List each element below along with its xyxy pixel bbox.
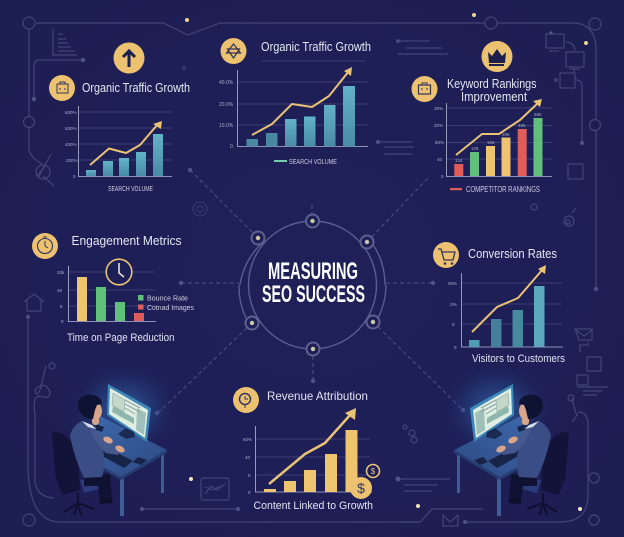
- caption: Content Linked to Growth: [254, 500, 373, 512]
- icon: dollar coins: [350, 464, 380, 499]
- panel: organic traffic growth (left): [49, 42, 190, 193]
- illustration: person at computer (right): [439, 360, 569, 516]
- icon: shopping cart: [433, 242, 459, 268]
- bar chart: 0: [441, 174, 444, 179]
- heading: Keyword Rankings: [447, 76, 537, 91]
- axis label: SEARCH VOLUME: [108, 186, 153, 193]
- bar chart: 45: [57, 288, 63, 293]
- bar chart: 5: [60, 304, 63, 309]
- panel: keyword rankings improvement: [412, 41, 552, 194]
- caption: Visitors to Customers: [472, 353, 565, 365]
- central ring hub: [239, 214, 386, 356]
- bar chart: 125: [471, 146, 479, 151]
- bar chart: 0: [248, 490, 251, 495]
- panel: revenue attribution: [233, 387, 380, 512]
- dashed connectors: [155, 168, 465, 415]
- legend: COMPETITOR RANKINGS: [466, 185, 540, 194]
- legend: SEARCH VOLUME: [289, 159, 337, 166]
- bar chart: 0: [248, 473, 251, 478]
- legend: [138, 294, 194, 312]
- bar chart: [448, 265, 563, 350]
- bar chart: 0: [61, 319, 64, 324]
- bar chart: [219, 67, 368, 150]
- bar chart: [65, 106, 172, 179]
- bar chart: 0: [73, 174, 76, 179]
- bar chart: 00%: [448, 281, 457, 286]
- icon: clock: [32, 233, 58, 259]
- caption: Time on Page Reduction: [67, 332, 174, 344]
- bar chart: 40: [437, 157, 443, 162]
- panel: conversion rates: [433, 242, 565, 365]
- title: MEASURING: [268, 258, 358, 285]
- icon: triangles: [220, 38, 246, 64]
- icon: dollar coins: $: [371, 467, 376, 476]
- bar chart: 400%: [65, 142, 77, 147]
- bar chart: 205: [502, 132, 510, 137]
- bar chart: [57, 266, 156, 324]
- bar chart: 165: [487, 140, 495, 145]
- bar chart: 40.0%: [219, 80, 234, 86]
- bar chart: [243, 408, 372, 495]
- bar chart: [434, 99, 552, 179]
- bar chart: 0: [230, 144, 233, 150]
- bar chart: 200%: [66, 158, 78, 163]
- legend: Cotnad Images: [147, 303, 194, 312]
- heading: Revenue Attribution: [267, 389, 368, 403]
- icon: up arrow: [114, 42, 144, 74]
- icon: briefcase: [412, 76, 438, 102]
- legend: [450, 185, 540, 194]
- icon: clock pin: [233, 387, 259, 413]
- bar chart: 600%: [65, 110, 77, 115]
- legend: [274, 159, 337, 166]
- bar chart: 30%: [434, 106, 443, 111]
- legend: Bounce Rate: [147, 294, 188, 302]
- bar chart: 0: [454, 345, 457, 350]
- illustration: person at computer (left): [52, 360, 182, 516]
- bar chart: 20%: [434, 123, 443, 128]
- heading: Improvement: [461, 89, 527, 104]
- icon: stopwatch clock: [106, 259, 132, 285]
- bar chart: 40: [245, 455, 251, 460]
- bar chart: 0: [452, 322, 455, 327]
- bar chart: 60%: [435, 140, 444, 145]
- bar chart: 20k: [57, 270, 65, 275]
- bar chart: 455: [518, 123, 526, 128]
- icon: briefcase: [49, 75, 75, 101]
- bar chart: 500%: [65, 126, 77, 131]
- heading: [447, 76, 537, 104]
- heading: Organic Traffic Growth: [82, 80, 190, 95]
- heading: Conversion Rates: [468, 246, 557, 261]
- bar chart: 580: [534, 112, 542, 117]
- bar chart: 60%: [243, 437, 252, 442]
- heading: Organic Traffic Growth: [261, 39, 371, 54]
- bar chart: .0%: [449, 302, 457, 307]
- bar chart: 134: [455, 158, 463, 163]
- icon: crown: [482, 41, 512, 72]
- panel: engagement metrics: [32, 233, 194, 344]
- bar chart: 10.0%: [219, 123, 234, 129]
- bar chart: 20.0%: [219, 102, 234, 108]
- title: SEO SUCCESS: [262, 281, 365, 308]
- heading: Engagement Metrics: [72, 233, 182, 248]
- title: [262, 258, 365, 308]
- panel: organic traffic growth (centre): [219, 38, 371, 166]
- icon: dollar coins: $: [357, 480, 365, 496]
